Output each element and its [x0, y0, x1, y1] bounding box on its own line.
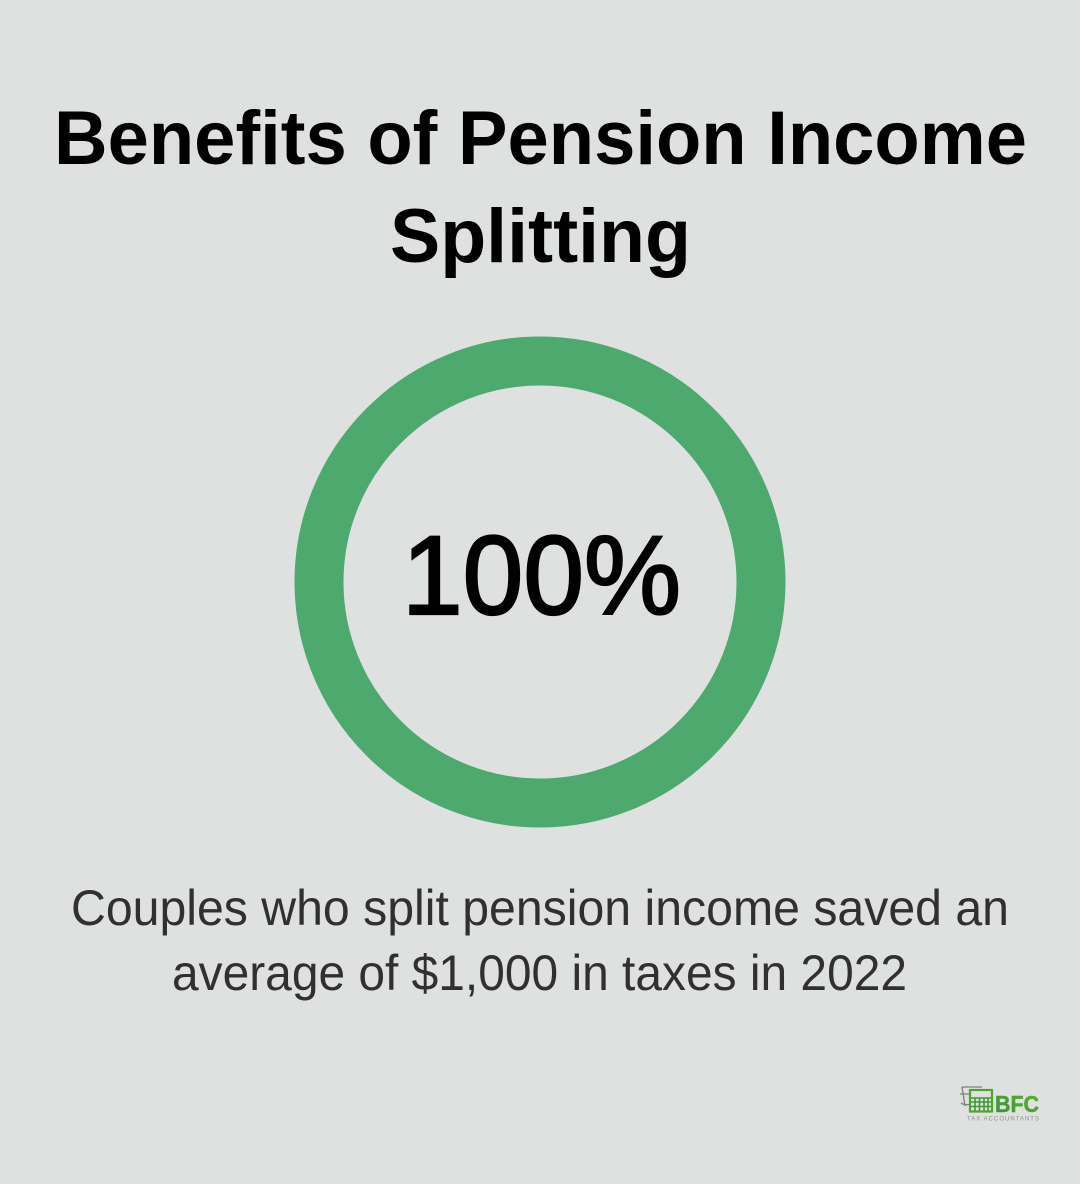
- donut chart: 100%: [319, 361, 761, 803]
- title: [54, 96, 1027, 279]
- title: Splitting: [390, 194, 691, 279]
- logo: BFC Tax Accountants: [960, 1087, 1039, 1122]
- title: Benefits of Pension Income: [54, 96, 1027, 181]
- description text: [71, 880, 1009, 1001]
- description text: average of $1,000 in taxes in 2022: [172, 945, 907, 1001]
- description text: Couples who split pension income saved an: [71, 880, 1009, 936]
- percentage value: 100%: [402, 513, 681, 638]
- logo wordmark: BFC: [995, 1091, 1039, 1117]
- icon: calculator: [960, 1087, 992, 1112]
- logo tagline: TAX ACCOUNTANTS: [967, 1116, 1039, 1122]
